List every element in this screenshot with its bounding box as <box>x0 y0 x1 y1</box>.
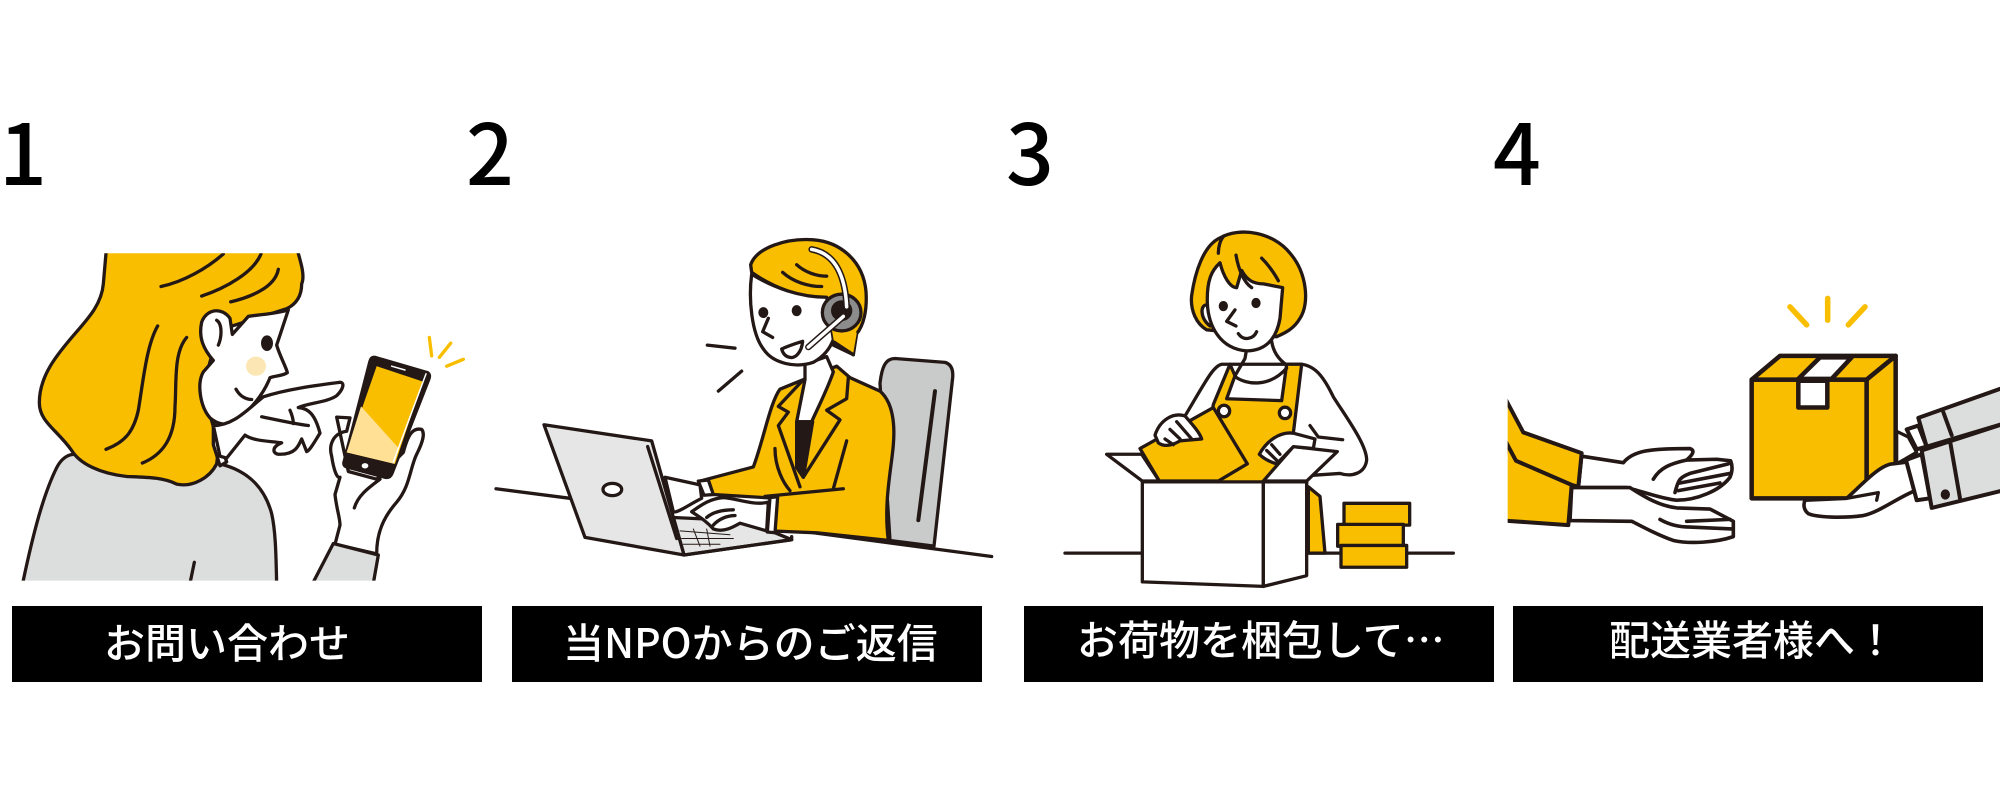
caption bar 3 <box>1024 606 1494 682</box>
illustration: parcel handed to courier <box>1503 298 2000 542</box>
caption bar 1: お問い合わせ <box>104 610 350 670</box>
panel: step 1 inquiry <box>0 89 482 682</box>
panel: step 3 packing <box>1006 89 1494 682</box>
caption bar 4 <box>1513 606 1983 682</box>
caption bar 2: 当NPOからのご返信 <box>563 610 938 670</box>
panel: step 2 reply <box>466 89 992 682</box>
step number 3: 3 <box>1006 89 1054 210</box>
illustration: woman using smartphone <box>23 246 463 583</box>
illustration: operator with headset at laptop <box>496 240 992 557</box>
caption bar 4: 配送業者様へ！ <box>1609 607 1896 667</box>
panel: step 4 handover <box>1493 89 2000 682</box>
step number 2: 2 <box>466 89 514 210</box>
caption bar 1 <box>12 606 482 682</box>
caption bar 2 <box>512 606 982 682</box>
step number 1: 1 <box>0 89 47 210</box>
caption bar 3: お荷物を梱包して… <box>1077 607 1445 667</box>
step number 4: 4 <box>1493 89 1541 210</box>
illustration: woman packing a box <box>1065 232 1453 586</box>
